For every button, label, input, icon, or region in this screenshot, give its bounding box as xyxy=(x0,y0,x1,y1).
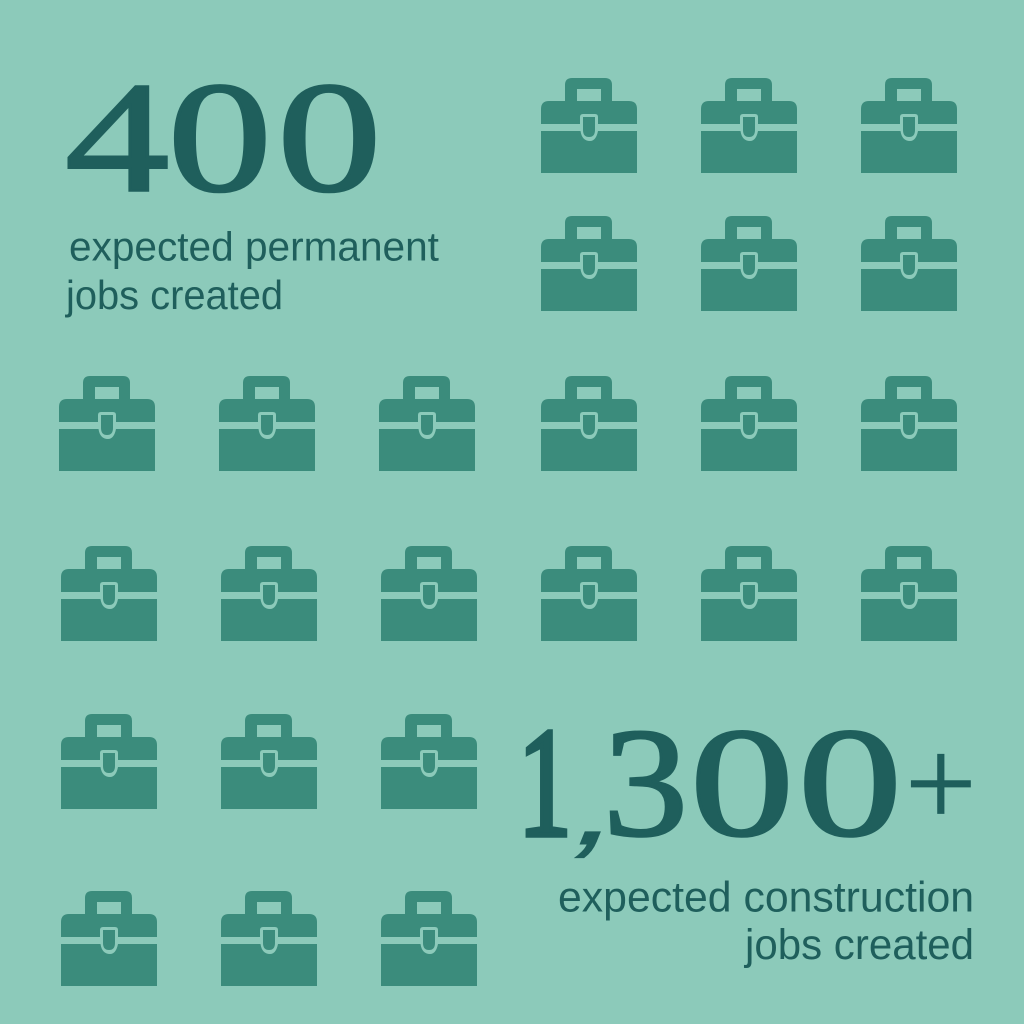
stat: 400 permanent jobs xyxy=(65,50,440,318)
number: 1,300+: 3 xyxy=(603,697,688,869)
text: expected construction jobs created xyxy=(558,873,974,969)
text: expected construction jobs created: expected construction xyxy=(558,873,974,922)
number: 1,300+: , xyxy=(564,766,635,864)
number: 1,300+: + xyxy=(905,714,977,854)
number: 1,300+ xyxy=(518,696,977,869)
icon grid: briefcases xyxy=(59,78,957,986)
number: 1,300+: 1 xyxy=(518,696,572,869)
number: 1,300+: 00 xyxy=(690,696,902,869)
number: 400: 400 xyxy=(65,50,381,226)
text: expected permanent jobs created: jobs created xyxy=(65,271,283,318)
text: expected construction jobs created: jobs created xyxy=(743,922,974,969)
stat: 1,300+ construction jobs xyxy=(518,696,977,969)
text: expected permanent jobs created: expected permanent xyxy=(69,223,440,270)
text: expected permanent jobs created xyxy=(65,223,440,318)
